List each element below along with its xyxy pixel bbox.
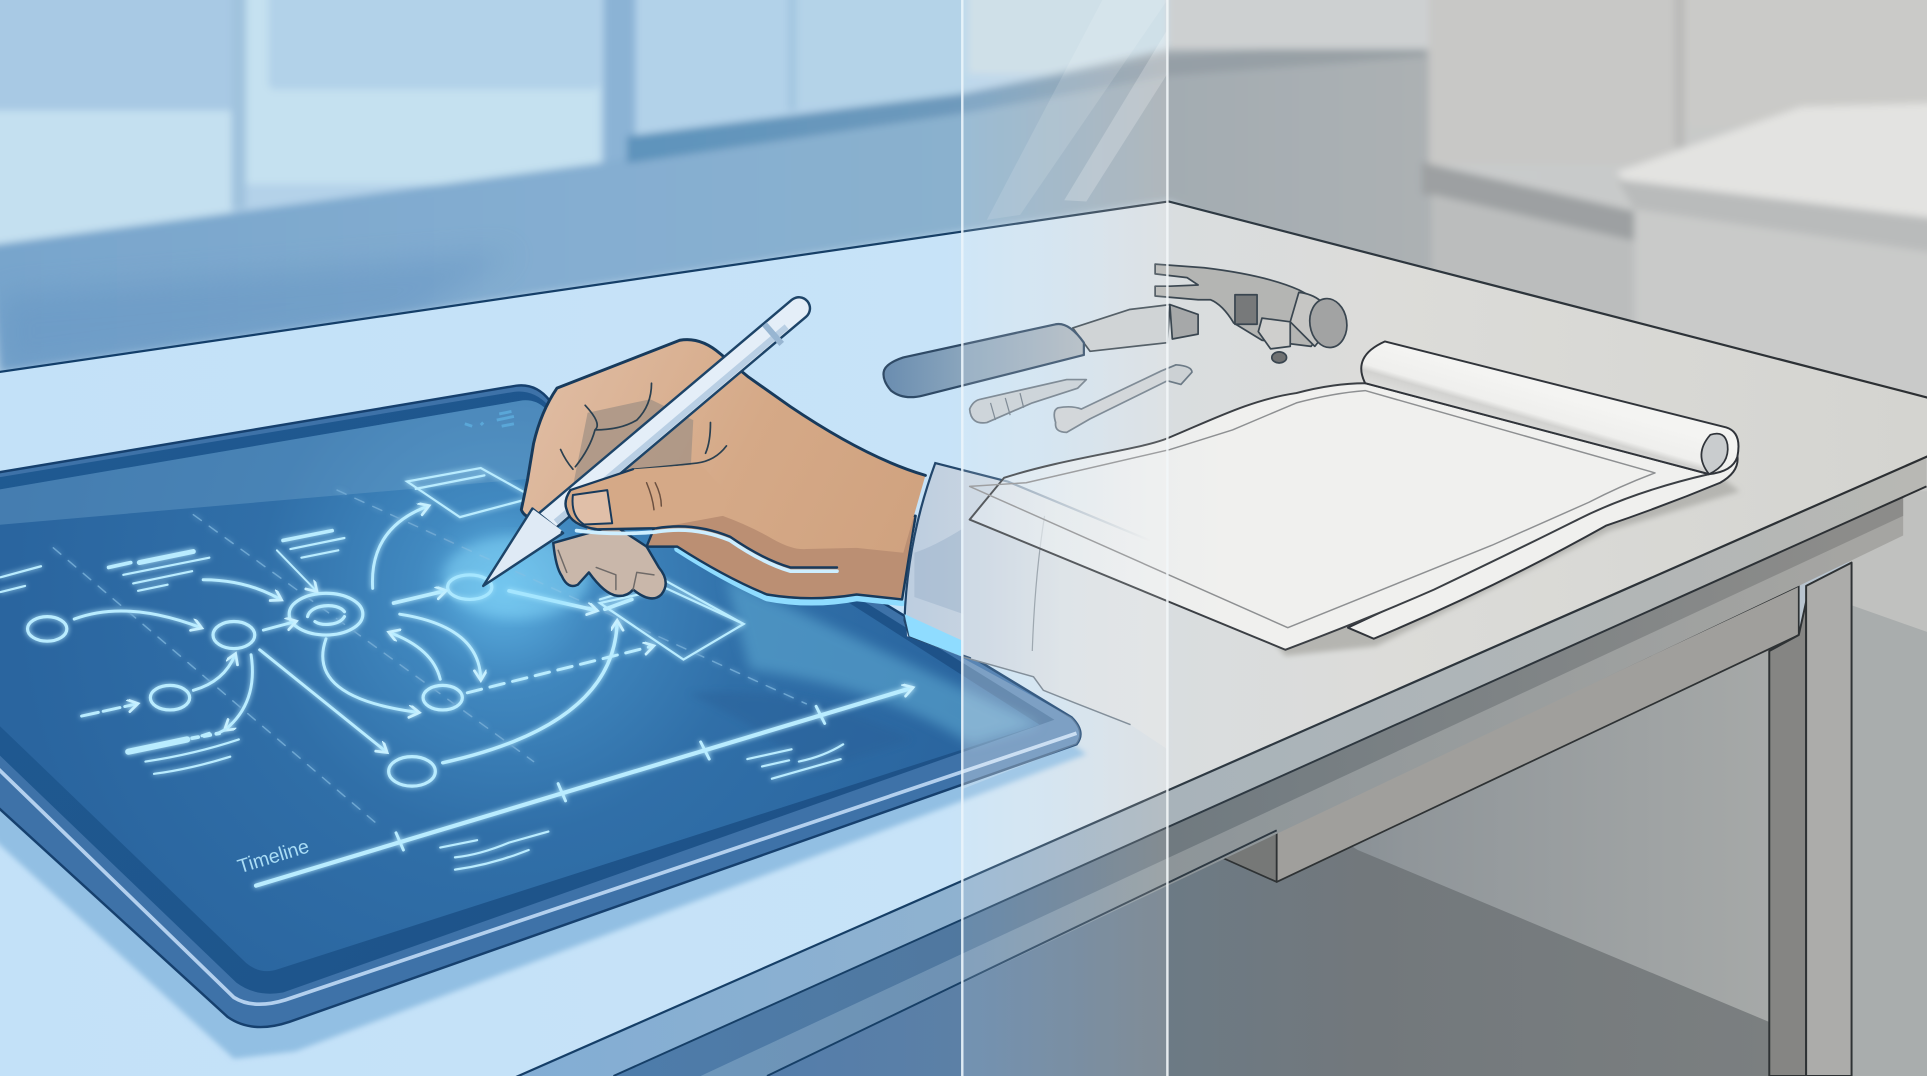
glass glare (1064, 29, 1167, 201)
lower screen shade (688, 692, 912, 774)
thumb in front of the pen (566, 464, 837, 571)
glass panel (961, 0, 1169, 1076)
finger creases (561, 383, 726, 469)
thumb top line (570, 469, 633, 490)
palm shading (573, 399, 693, 486)
background table (1638, 203, 1927, 424)
thumbnail (573, 490, 612, 524)
paper shadow (1229, 467, 1740, 656)
back floor (0, 29, 1634, 405)
hand outline (521, 340, 925, 518)
small screwdriver (970, 380, 1086, 423)
timeline label: Timeline (235, 836, 312, 878)
dark skirting band (627, 37, 1425, 163)
right upper wall (1167, 0, 1429, 49)
tablet bezel highlight (0, 733, 1077, 1004)
wrench (1054, 365, 1192, 432)
pen (483, 308, 799, 586)
soft shade at lower left of the room (1, 252, 516, 375)
thumb (566, 464, 726, 529)
workflow diagram (1, 468, 912, 886)
screen top strip (0, 400, 639, 526)
sheet border (970, 391, 1655, 628)
desk front band shadow (613, 486, 1926, 1076)
window boxes (407, 468, 744, 660)
under sheet (1348, 456, 1738, 639)
tablet (0, 385, 1080, 1027)
lit back of hand (521, 340, 925, 553)
under-hand glow (677, 549, 902, 603)
blurred room background (0, 0, 1927, 504)
under-desk floor (688, 798, 1769, 1076)
thumb lower edge (566, 490, 837, 567)
shaded lower hand (647, 504, 916, 599)
desk lip (513, 456, 1926, 1076)
left cabinets (0, 0, 231, 111)
hand glow on screen (443, 536, 590, 619)
right wall beyond the leg (1849, 491, 1927, 1076)
tablet screen (0, 400, 1040, 971)
large screwdriver shaft (1073, 305, 1170, 351)
arrows (74, 506, 653, 763)
desk apron rail (1221, 586, 1799, 882)
thumb wrinkles (647, 483, 661, 510)
tablet shadow (0, 590, 1086, 1059)
tablet fade through glass (964, 658, 1080, 789)
lower fingers (553, 526, 666, 598)
timeline ticks (396, 706, 825, 850)
sleeve (905, 463, 1167, 749)
rolled top (1361, 341, 1738, 474)
desk edge lines (613, 486, 1926, 1076)
status icons (465, 411, 514, 426)
timeline axis (256, 688, 912, 886)
tablet bezel (0, 392, 1054, 994)
large screwdriver tip block (1170, 305, 1198, 339)
right cabinets (1429, 0, 1675, 165)
nodes (28, 575, 492, 786)
tablet body (0, 385, 1080, 1027)
hand (521, 340, 925, 603)
hammer (1155, 264, 1350, 363)
desk front band (613, 486, 1926, 1076)
under-desk wall (1167, 540, 1800, 1076)
screen right glow (725, 577, 1040, 744)
tools (884, 264, 1350, 432)
tail of lower bar (202, 730, 225, 736)
thumb lower edge highlight (577, 530, 837, 571)
blueprint paper (970, 341, 1738, 650)
dashed guide lines (53, 490, 806, 825)
large screwdriver handle (884, 324, 1084, 397)
desk leg (1769, 563, 1852, 1076)
main sheet (970, 383, 1709, 650)
note lines (1, 531, 843, 870)
